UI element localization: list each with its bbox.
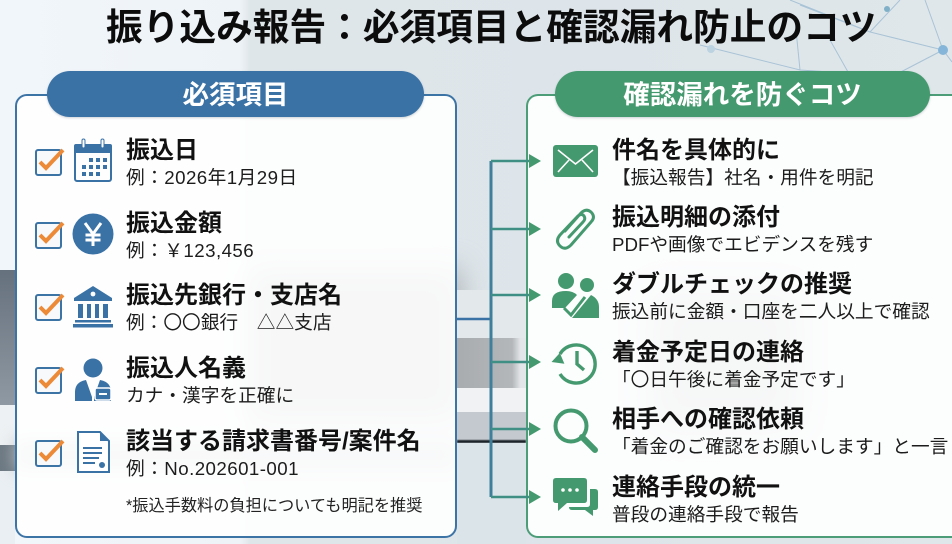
heading: 着金予定日の連絡 (612, 339, 804, 366)
panel: required items (15, 71, 457, 538)
heading: 振込先銀行・支店名 (126, 282, 342, 309)
detail text: 【振込報告】社名・用件を明記 (612, 167, 874, 188)
example text: 例：No.202601-001 (126, 458, 299, 479)
detail text: 「着金のご確認をお願いします」と一言 (612, 436, 948, 457)
detail text: 普段の連絡手段で報告 (612, 504, 799, 525)
heading: 振込金額 (126, 210, 222, 237)
heading: 連絡手段の統一 (612, 474, 780, 501)
item: invoice number (35, 428, 421, 479)
icon: calendar (74, 138, 112, 182)
heading pill: tips: 確認漏れを防ぐコツ (623, 80, 862, 110)
item: transfer amount (35, 210, 254, 261)
item: destination bank (35, 282, 342, 333)
example text: 例：2026年1月29日 (126, 167, 298, 188)
panel: tips to prevent missed checks (526, 71, 952, 538)
icon: people with check (552, 273, 599, 318)
tip: specific subject (553, 137, 874, 188)
tip: double check (552, 271, 930, 322)
checkbox (35, 440, 64, 467)
icon: bank (73, 286, 113, 328)
heading: 該当する請求書番号/案件名 (126, 428, 421, 455)
heading pill: required items (47, 71, 424, 117)
panel frame (15, 94, 457, 538)
panel frame (526, 94, 952, 538)
tip: unify contact method (553, 474, 799, 525)
example text: 例：〇〇銀行 △△支店 (126, 312, 332, 333)
icon: person with badge (75, 358, 111, 401)
title: 振り込み報告：必須項目と確認漏れ防止のコツ (106, 7, 876, 48)
detail text: 振込前に金額・口座を二人以上で確認 (612, 301, 930, 322)
checkbox (35, 294, 64, 321)
heading: ダブルチェックの推奨 (612, 271, 852, 298)
icon: clock with arrow (552, 343, 597, 385)
heading pill: tips (555, 71, 930, 117)
detail text: PDFや画像でエビデンスを残す (612, 234, 873, 255)
checkbox (35, 366, 64, 394)
icon: document (77, 431, 110, 473)
footnote: *振込手数料の負担についても明記を推奨 (126, 497, 422, 515)
icon: envelope (553, 145, 598, 177)
connector arrows between panels (457, 154, 541, 504)
icon: chat bubbles (553, 478, 598, 516)
icon: magnifier (554, 408, 598, 453)
checkbox (35, 222, 64, 249)
heading: 相手への確認依頼 (612, 406, 804, 433)
item: transfer date (35, 137, 298, 188)
heading pill: required items: 必須項目 (182, 80, 288, 110)
icon: yen coin (72, 214, 114, 254)
example text: カナ・漢字を正確に (126, 385, 294, 406)
icon: paperclip (556, 208, 595, 250)
item: remitter name (35, 355, 294, 406)
checkbox (35, 148, 64, 176)
tip: attach statement (556, 204, 873, 255)
heading: 振込明細の添付 (612, 204, 780, 231)
heading: 件名を具体的に (612, 137, 780, 164)
tip: expected payment date (552, 339, 855, 390)
detail text: 「〇日午後に着金予定です」 (612, 369, 855, 390)
tip: ask for confirmation (554, 406, 948, 457)
heading: 振込日 (126, 137, 198, 164)
heading: 振込人名義 (126, 355, 246, 382)
example text: 例：￥123,456 (126, 240, 254, 261)
